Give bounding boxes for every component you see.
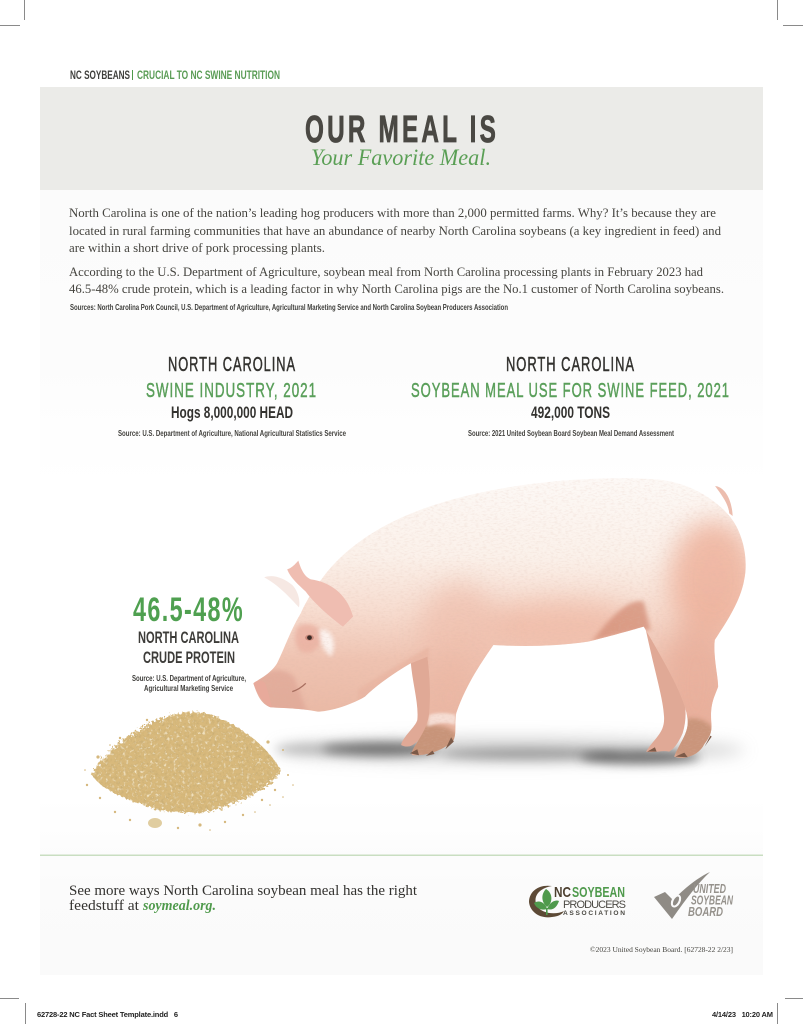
sources note: Sources: North Carolina Pork Council, U.S. Department of Agriculture, Agricultural Marketing Service and North Carolina Soybean Producers Association	[70, 303, 508, 312]
stat: crude protein: Source: U.S. Department of Agriculture,	[132, 674, 246, 683]
ground shadow	[275, 738, 745, 764]
pig mouth line	[292, 683, 306, 692]
intro text block: 46.5-48% crude protein, which is a leading factor in why North Carolina pigs are the No.1 customer of North Carolina soybeans.	[69, 282, 724, 296]
pig snout	[253, 681, 272, 707]
stat: swine industry: NORTH CAROLINA	[168, 353, 296, 376]
footer call to action: feedstuff at	[69, 898, 139, 914]
intro text block: According to the U.S. Department of Agriculture, soybean meal from North Carolina processing plants in February 2023 had	[69, 265, 704, 279]
stat: crude protein: NORTH CAROLINA	[138, 628, 239, 647]
stat: swine industry	[118, 353, 346, 438]
logo: NC Soybean Producers Association	[529, 884, 626, 917]
running head	[70, 70, 280, 82]
stat: soybean meal use: 492,000 TONS	[531, 404, 610, 422]
pig far legs	[401, 620, 686, 752]
logo: NC Soybean Producers Association: ASSOCIATION	[563, 910, 625, 917]
check mark	[654, 872, 710, 919]
stat: soybean meal use: NORTH CAROLINA	[506, 353, 635, 376]
title: OUR MEAL IS	[305, 109, 499, 151]
copyright: ©2023 United Soybean Board. [62728-22 2/23]	[590, 945, 733, 954]
logo swoosh	[529, 886, 564, 917]
intro text block: located in rural farming communities that have an abundance of nearby North Carolina soybeans (a key ingredient in feed) and	[69, 224, 722, 238]
stat: soybean meal use	[411, 353, 730, 438]
stat: crude protein: CRUDE PROTEIN	[143, 648, 235, 667]
logo: United Soybean Board: UNITED	[693, 882, 726, 896]
intro text block: North Carolina is one of the nation’s leading hog producers with more than 2,000 permitted farms. Why? It’s because they are	[69, 206, 717, 220]
pig body	[253, 478, 746, 758]
stat: crude protein: 46.5-48%	[133, 591, 244, 629]
title	[305, 109, 499, 170]
scattered meal grains	[84, 719, 294, 831]
print slug left: 62728-22 NC Fact Sheet Template.indd 6	[37, 1010, 178, 1019]
logo: United Soybean Board: BOARD	[688, 905, 723, 919]
logo: NC Soybean Producers Association: PRODUCERS	[563, 899, 626, 911]
logo: United Soybean Board	[654, 872, 734, 919]
footer call to action: See more ways North Carolina soybean meal has the right	[69, 883, 417, 899]
running head: CRUCIAL TO NC SWINE NUTRITION	[137, 70, 280, 82]
pig tail	[715, 486, 733, 516]
illustration: soybean meal pile	[84, 712, 294, 831]
pig far ear	[264, 576, 299, 607]
running head: NC SOYBEANS	[70, 70, 130, 82]
page background panel	[40, 87, 763, 975]
logo: United Soybean Board: SOYBEAN	[691, 894, 734, 908]
pig near ear	[287, 561, 353, 627]
footer call to action	[69, 883, 417, 914]
intro text block	[69, 206, 724, 296]
stat: crude protein: Agricultural Marketing Service	[144, 684, 233, 693]
pig hooves	[410, 736, 712, 757]
stat: swine industry: Hogs 8,000,000 HEAD	[171, 404, 293, 422]
pig eye	[305, 635, 314, 641]
illustration: pig	[250, 470, 757, 763]
logo leaves	[534, 889, 559, 915]
header band	[40, 87, 763, 190]
title: Your Favorite Meal.	[311, 145, 491, 170]
stat: swine industry: SWINE INDUSTRY, 2021	[146, 379, 317, 402]
pig shading	[250, 470, 757, 763]
footer divider	[40, 854, 763, 856]
stat: swine industry: Source: U.S. Department of Agriculture, National Agricultural Statistics Service	[118, 429, 346, 438]
stat: soybean meal use: Source: 2021 United Soybean Board Soybean Meal Demand Assessment	[468, 429, 674, 438]
print slug right: 4/14/23 10:20 AM	[712, 1010, 773, 1019]
stat: crude protein	[132, 591, 246, 693]
footer call to action: soymeal.org.	[142, 898, 216, 914]
logo: NC Soybean Producers Association: SOYBEAN	[572, 884, 625, 901]
intro text block: are within a short drive of pork processing plants.	[69, 241, 325, 255]
logo: NC Soybean Producers Association: NC	[554, 884, 571, 901]
